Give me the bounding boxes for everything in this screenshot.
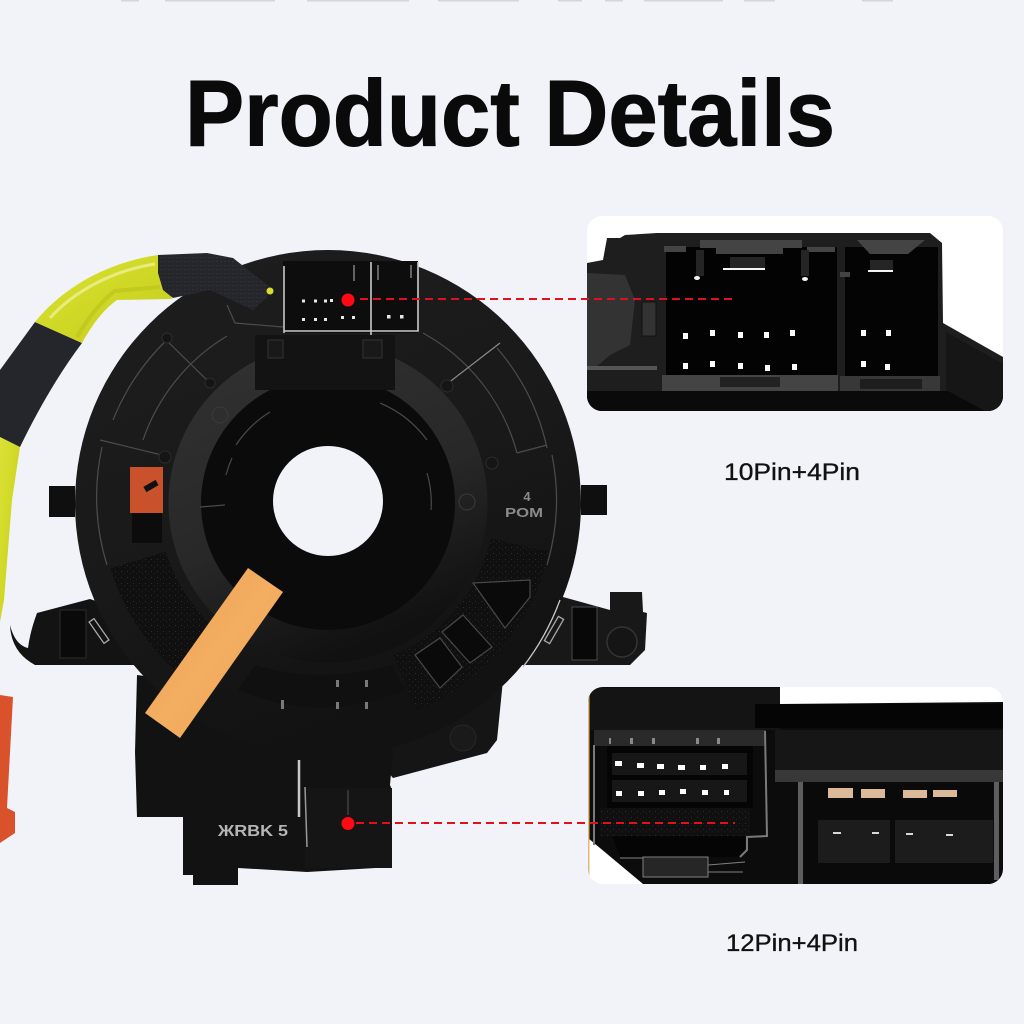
right cavity: [845, 247, 938, 376]
textured lower left panel: [138, 560, 215, 665]
lower connector: [299, 760, 392, 868]
yellow wire upper: [35, 255, 172, 343]
title: Product Details: [185, 60, 835, 166]
panel rib lines: [97, 305, 556, 565]
inner black area: [201, 376, 455, 630]
wire sleeve: [158, 253, 274, 310]
clipped heading remnant at top edge: [121, 0, 893, 2]
side clip right: [581, 485, 607, 515]
rib nodes: [159, 333, 498, 469]
left cavity: [666, 247, 837, 375]
black tape on wire: [0, 322, 82, 447]
POM marking: POM: [505, 505, 543, 520]
inner arcs: [200, 403, 431, 510]
textured strip: [601, 811, 749, 836]
rim highlight: [523, 600, 560, 667]
panel: 10Pin+4Pin connector photo: [587, 216, 1003, 411]
connector pins: [302, 299, 404, 321]
bottom centre panel: [238, 665, 405, 709]
right wedge: [946, 332, 1003, 411]
cavity rows: [612, 753, 747, 775]
right connector cavity: [988, 883, 993, 884]
orange wire connector: [0, 695, 15, 843]
left cavity: [607, 746, 753, 808]
inner ring: [185, 360, 475, 646]
side clip left: [49, 486, 75, 517]
top left shroud: [590, 688, 598, 694]
label: 12Pin+4Pin: 12Pin+4Pin: [726, 930, 858, 957]
bottom glossy strip: [587, 366, 1003, 411]
top tabs: [664, 240, 925, 277]
upper right bar: [755, 704, 1003, 782]
part number marking: ЖRBK 5: [217, 823, 288, 840]
inner blocks: [818, 820, 993, 863]
connector top strip: [594, 730, 766, 746]
right mounting bracket: [515, 592, 647, 665]
orange tab: [145, 568, 283, 738]
label: 10Pin+4Pin: 10Pin+4Pin: [724, 459, 860, 486]
side rails: [798, 782, 999, 884]
textured lower right panel: [405, 545, 530, 688]
product: clock spring assembly: [0, 250, 647, 885]
housing: [587, 233, 1003, 411]
centre hole: [273, 446, 383, 556]
side tab highlights: [89, 616, 564, 644]
red-orange window: [130, 467, 163, 543]
connector outline: [594, 731, 767, 857]
lower cavity: [612, 836, 745, 857]
connector highlights: [694, 268, 893, 281]
yellow wire lower: [0, 437, 20, 622]
pins: [683, 330, 891, 371]
lower housing block: [135, 675, 393, 885]
gold edge: [588, 690, 590, 880]
callout top connector: red dot and dashed leader: [342, 294, 735, 306]
centre posts: [696, 250, 893, 276]
12 pins: [615, 761, 729, 796]
left mounting bracket: [10, 599, 150, 665]
cloth sleeve: [587, 273, 635, 368]
panel: 12Pin+4Pin connector photo: [588, 687, 1003, 884]
callout lower connector: red dot and dashed leader: [342, 817, 735, 830]
top block behind connector: [255, 335, 395, 390]
white ticks: [833, 832, 953, 836]
plug tab: [620, 857, 745, 877]
POM marking: 4: [523, 489, 531, 504]
main disc: [75, 250, 581, 756]
copper pins: [828, 788, 957, 798]
POM marking: [505, 489, 543, 520]
dark photo base: [588, 687, 1003, 884]
yellow wire tip: [266, 288, 274, 294]
left latch: [642, 302, 656, 336]
lower right lobe: [360, 680, 503, 778]
top connector: [283, 261, 418, 335]
